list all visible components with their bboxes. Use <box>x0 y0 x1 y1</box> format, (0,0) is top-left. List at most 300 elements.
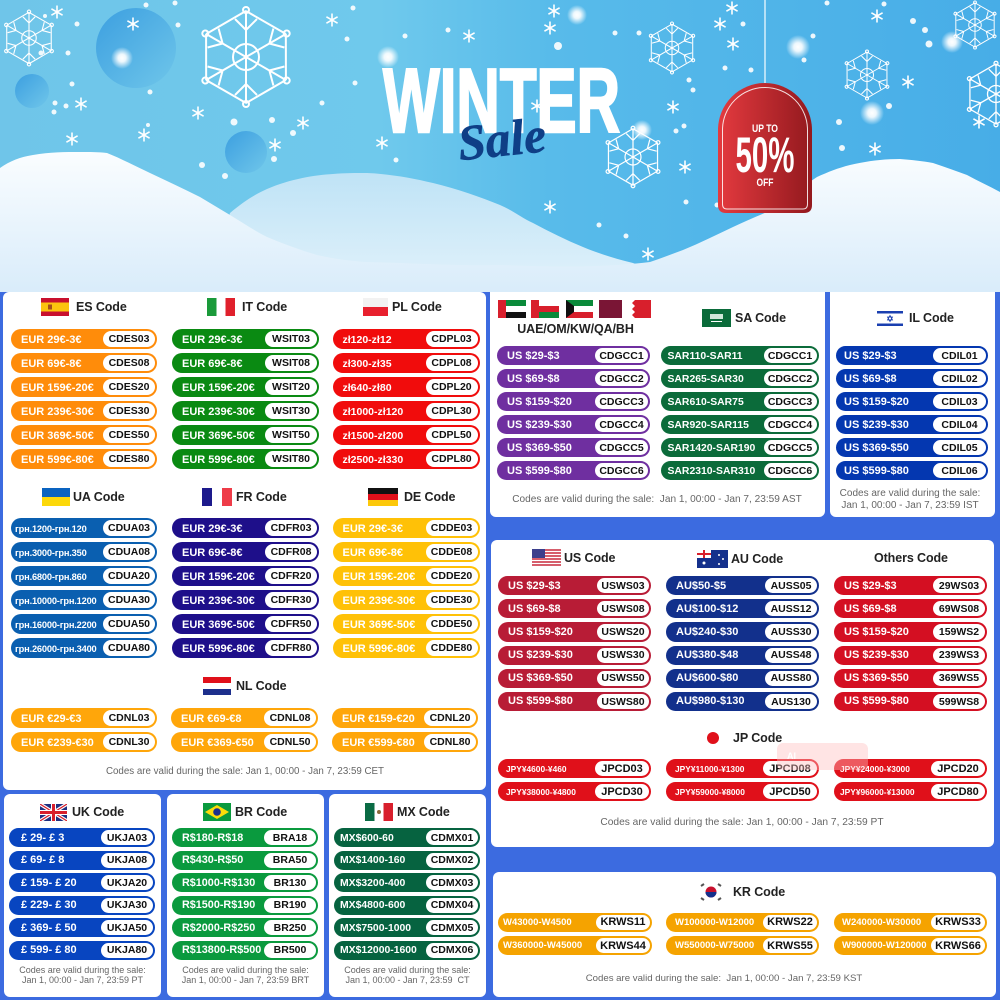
pill group: SA codes <box>660 346 818 485</box>
icon: UK flag <box>40 804 67 821</box>
heading: ES Code <box>41 298 127 316</box>
pill group: PL codes <box>333 329 480 469</box>
heading: US Code: US Code <box>564 551 615 565</box>
pill group: ES codes: EUR 599€-80€ <box>21 454 94 466</box>
pill group: Gulf codes: US $369-$50 <box>507 442 572 454</box>
icon: Australia flag <box>697 550 728 568</box>
pill group: UK codes <box>9 828 155 960</box>
heading: PL Code: PL Code <box>392 300 442 314</box>
pill group: Others codes: US $69-$8 <box>844 603 897 615</box>
pill group: FR codes: EUR 239€-30€ <box>182 594 255 606</box>
pill group: US codes: US $599-$80 <box>508 695 573 707</box>
validity note: Codes are valid during the sale: <box>344 965 471 975</box>
pill group: IL codes: CDIL05 <box>941 442 978 454</box>
pill group: NL codes right: CDNL20 <box>430 712 470 724</box>
icon: Israel flag <box>877 310 903 326</box>
heading: AU Code: AU Code <box>731 552 783 566</box>
pill group: IT codes: EUR 159€-20€ <box>182 382 255 394</box>
small asterisk snowflakes <box>51 2 985 260</box>
panel: BR codes <box>167 794 324 997</box>
pill group: MX codes: MX$3200-400 <box>340 878 405 888</box>
pill group: MX codes: MX$4800-600 <box>340 900 405 911</box>
pill group: UA codes: CDUA03 <box>108 522 150 534</box>
pill group: MX codes: CDMX01 <box>431 832 473 844</box>
pill group: BR codes: R$1000-R$130 <box>182 876 255 888</box>
icon: US flag <box>532 549 561 567</box>
icon: Ukraine flag <box>42 488 70 506</box>
panel: Gulf and SA codes <box>490 292 825 517</box>
pill group: DE codes: CDDE20 <box>431 570 472 582</box>
pill group: FR codes: CDFR80 <box>271 642 311 654</box>
pill group: UA codes: грн.10000-грн.1200 <box>15 596 97 606</box>
pill group: PL codes: CDPL50 <box>431 429 472 441</box>
pill group: PL codes: CDPL08 <box>431 357 472 369</box>
pill group: Others codes: US $159-$20 <box>844 626 909 638</box>
pill group: SA codes: SAR265-SAR30 <box>668 374 744 385</box>
pill group: ES codes <box>11 329 157 469</box>
pill group: US codes: USWS08 <box>601 603 645 615</box>
pill group: ES codes: EUR 69€-8€ <box>21 358 82 370</box>
pill group: IL codes: CDIL02 <box>941 373 978 385</box>
pill group: BR codes: BRA18 <box>273 832 307 844</box>
heading: UAE/OM/KW/QA/BH: UAE/OM/KW/QA/BH <box>517 322 634 336</box>
pill group: SA codes: SAR110-SAR11 <box>668 350 743 362</box>
pill group: SA codes: CDGCC6 <box>768 465 812 477</box>
pill group: UK codes: £ 599- £ 80 <box>21 944 77 956</box>
pill group: Gulf codes: US $599-$80 <box>507 465 572 477</box>
validity note <box>344 965 471 985</box>
pill group: US codes: US $69-$8 <box>508 603 561 615</box>
pill group: DE codes: EUR 239€-30€ <box>342 594 415 606</box>
pill group: JP codes right <box>834 759 987 805</box>
pill group: Gulf codes: CDGCC1 <box>599 350 644 362</box>
validity note: Jan 1, 00:00 - Jan 7, 23:59 CT <box>345 975 470 985</box>
pill group: MX codes: CDMX04 <box>431 899 473 911</box>
pill group: PL codes: zł1000-zł120 <box>342 406 403 418</box>
pill group: AU codes: AU$50-$5 <box>676 580 726 592</box>
sky background <box>0 0 1000 292</box>
pill group: DE codes: EUR 159€-20€ <box>342 570 415 582</box>
pill group: AU codes: AUSS80 <box>771 672 811 684</box>
pill group: UA codes <box>11 518 157 658</box>
pill group: DE codes: EUR 369€-50€ <box>342 618 415 630</box>
heading: SA Code: SA Code <box>735 311 786 325</box>
pill group: Gulf codes: CDGCC5 <box>599 442 644 454</box>
heading: SA Code <box>702 309 786 327</box>
pill group: JP codes middle: JPY¥11000-¥1300 <box>675 764 744 774</box>
pill group: AU codes <box>666 576 819 715</box>
pill group: MX codes: CDMX06 <box>431 944 473 956</box>
pill group: IL codes: CDIL03 <box>941 396 978 408</box>
pill group: ES codes: EUR 29€-3€ <box>21 334 82 346</box>
pill group: Others codes: 239WS3 <box>939 649 979 661</box>
pill group: BR codes: BRA50 <box>273 854 307 866</box>
snow hills <box>0 152 1000 292</box>
pill group: MX codes: CDMX05 <box>431 922 473 934</box>
heading: AU Code <box>697 550 783 568</box>
pill group: SA codes: CDGCC4 <box>768 419 812 431</box>
pill group: US codes <box>498 576 651 715</box>
validity note <box>830 488 990 512</box>
pill group: SA codes: SAR920-SAR115 <box>668 420 749 431</box>
pill group: NL codes left <box>11 708 157 752</box>
icon: Korea flag <box>700 883 722 901</box>
pill group: DE codes: CDDE03 <box>431 522 472 534</box>
pill group: US codes: USWS20 <box>601 626 645 638</box>
pill group: US codes: US $239-$30 <box>508 649 573 661</box>
heading: UK Code <box>40 804 124 821</box>
pill group: Others codes: US $29-$3 <box>844 580 897 592</box>
pill group: JP codes left: JPY¥38000-¥4800 <box>506 787 576 797</box>
panel: Europe codes <box>3 292 486 790</box>
pill group: SA codes: SAR2310-SAR310 <box>668 466 755 477</box>
pill group: JP codes middle <box>666 759 819 805</box>
pill group: JP codes left: JPCD03 <box>601 763 643 775</box>
pill group: IL codes: US $369-$50 <box>844 442 909 454</box>
validity note: Jan 1, 00:00 - Jan 7, 23:59 PT <box>22 975 143 985</box>
pill group: AU codes: AUSS05 <box>771 580 811 592</box>
pill group: MX codes: CDMX03 <box>431 876 473 888</box>
validity note: Codes are valid during the sale: Jan 1, 00:00 - Jan 7, 23:59 KST <box>586 973 862 984</box>
icon: Poland flag <box>363 298 388 316</box>
pill group: SA codes: CDGCC5 <box>768 442 812 454</box>
pill group: FR codes: CDFR30 <box>271 594 311 606</box>
heading: BR Code: BR Code <box>235 805 287 819</box>
pill group: AU codes: AU$980-$130 <box>676 695 744 707</box>
heading: ES Code: ES Code <box>76 300 127 314</box>
pill group: IT codes: EUR 599€-80€ <box>182 454 255 466</box>
pill group: NL codes left: CDNL30 <box>109 736 149 748</box>
icon: Mexico flag <box>365 803 393 821</box>
pill group: ES codes: CDES08 <box>109 357 149 369</box>
icon: Brazil flag <box>203 803 231 821</box>
pill group: AU codes: AU$380-$48 <box>676 649 738 661</box>
pill group: KR codes middle: KRWS55 <box>767 940 813 952</box>
pill group: JP codes middle: JPCD08 <box>769 763 811 775</box>
pill group: PL codes: CDPL03 <box>431 333 472 345</box>
heading: PL Code <box>363 298 442 316</box>
pill group: US codes: USWS80 <box>601 696 645 708</box>
heading: MX Code <box>365 803 450 821</box>
icon: Japan flag <box>707 732 719 744</box>
validity note: Codes are valid during the sale: Jan 1, 00:00 - Jan 7, 23:59 AST <box>512 494 802 505</box>
heading: KR Code <box>700 883 785 901</box>
hanging sale tag: OFF <box>756 177 774 189</box>
icon: France flag <box>202 488 232 506</box>
heading: DE Code <box>368 488 455 506</box>
pill group: UA codes: грн.26000-грн.3400 <box>15 644 97 654</box>
pill group: ES codes: EUR 239€-30€ <box>21 406 94 418</box>
validity note: Jan 1, 00:00 - Jan 7, 23:59 IST <box>841 500 979 511</box>
pill group: UK codes: UKJA03 <box>107 832 147 844</box>
pill group: FR codes: EUR 159€-20€ <box>182 570 255 582</box>
pill group: Others codes: 69WS08 <box>939 603 979 615</box>
heading: FR Code <box>202 488 287 506</box>
pill group: Others codes: 29WS03 <box>939 580 979 592</box>
pill group: ES codes: EUR 369€-50€ <box>21 430 94 442</box>
pill group: Others codes: US $369-$50 <box>844 672 909 684</box>
pill group: NL codes right: CDNL80 <box>430 736 470 748</box>
pill group: ES codes: CDES03 <box>109 333 149 345</box>
pill group: BR codes <box>172 828 318 960</box>
pill group: NL codes middle <box>171 708 318 752</box>
pill group: ES codes: CDES30 <box>109 405 149 417</box>
pill group: NL codes middle: EUR €69-€8 <box>181 712 242 724</box>
pill group: Others codes: 369WS5 <box>939 672 979 684</box>
pill group: BR codes: R$13800-R$500 <box>182 944 261 956</box>
pill group: AU codes: AU$240-$30 <box>676 626 738 638</box>
pill group: MX codes: MX$12000-1600 <box>340 945 417 956</box>
pill group: FR codes: CDFR03 <box>271 522 311 534</box>
pill group: SA codes: CDGCC3 <box>768 396 812 408</box>
pill group: UA codes: грн.16000-грн.2200 <box>15 620 97 630</box>
pill group: PL codes: CDPL30 <box>431 405 472 417</box>
pill group: KR codes middle <box>666 912 819 959</box>
watermark toolbar overlay <box>777 743 868 770</box>
pill group: NL codes left: CDNL03 <box>109 712 149 724</box>
heading: JP Code: JP Code <box>733 731 782 745</box>
pill group: SA codes: SAR1420-SAR190 <box>668 443 755 454</box>
pill group: IT codes: WSIT03 <box>272 333 310 345</box>
heading: MX Code: MX Code <box>397 805 450 819</box>
pill group: IL codes: US $29-$3 <box>844 350 897 362</box>
pill group: Gulf codes: US $239-$30 <box>507 419 572 431</box>
pill group: UK codes: £ 229- £ 30 <box>21 899 77 911</box>
validity note: Codes are valid during the sale: <box>182 965 309 975</box>
pill group: JP codes right: JPY¥96000-¥13000 <box>840 787 915 797</box>
heading: BR Code <box>203 803 287 821</box>
pill group: DE codes: EUR 599€-80€ <box>342 642 415 654</box>
pill group: IT codes: WSIT30 <box>272 405 310 417</box>
hanging sale tag: 50% <box>736 127 794 183</box>
heading: JP Code <box>707 729 782 747</box>
panel: IL codes <box>830 292 995 517</box>
pill group: PL codes: zł120-zł12 <box>342 334 392 346</box>
pill group: MX codes: MX$1400-160 <box>340 855 405 866</box>
pill group: PL codes: CDPL80 <box>431 453 472 465</box>
pill group: AU codes: AUS130 <box>771 696 811 708</box>
pill group: JP codes right: JPCD80 <box>937 786 979 798</box>
validity note <box>19 965 146 985</box>
pill group: FR codes: EUR 369€-50€ <box>182 618 255 630</box>
pill group: Gulf codes <box>497 346 650 480</box>
pill group: KR codes left: KRWS44 <box>600 940 646 952</box>
heading: DE Code: DE Code <box>404 490 455 504</box>
pill group: UK codes: UKJA08 <box>107 854 147 866</box>
pill group: IL codes: CDIL04 <box>941 419 978 431</box>
heading: IL Code <box>877 309 954 327</box>
title: WINTER: WINTER <box>383 51 620 152</box>
pill group: KR codes middle: W100000-W12000 <box>675 917 754 928</box>
pill group: NL codes left: EUR €239-€30 <box>21 736 94 748</box>
pill group: JP codes left <box>498 759 651 805</box>
pill group: NL codes middle: EUR €369-€50 <box>181 736 254 748</box>
pill group: KR codes left: KRWS11 <box>600 916 646 928</box>
heading: UK Code: UK Code <box>72 805 124 819</box>
validity note: Codes are valid during the sale: <box>19 965 146 975</box>
pill group: IT codes: WSIT08 <box>272 357 310 369</box>
pill group: US codes: USWS03 <box>601 580 645 592</box>
pill group: BR codes: R$180-R$18 <box>182 832 243 844</box>
pill group: JP codes right: JPY¥24000-¥3000 <box>840 764 910 774</box>
pill group: AU codes: AUSS48 <box>771 649 811 661</box>
pill group: NL codes middle: CDNL50 <box>270 736 310 748</box>
heading: NL Code <box>203 677 286 695</box>
pill group: UA codes: CDUA08 <box>108 546 150 558</box>
pill group: UA codes: CDUA80 <box>108 642 150 654</box>
pill group: Gulf codes: US $29-$3 <box>507 350 560 362</box>
pill group: FR codes <box>172 518 319 658</box>
pill group: JP codes left: JPCD30 <box>601 786 643 798</box>
heading: Others Code: Others Code <box>874 551 948 565</box>
pill group: KR codes right: KRWS66 <box>935 940 981 952</box>
pill group: IL codes <box>836 346 988 485</box>
pill group: Others codes: 599WS8 <box>939 696 979 708</box>
pill group: BR codes: BR130 <box>274 876 306 888</box>
pill group: BR codes: R$2000-R$250 <box>182 922 255 934</box>
pill group: KR codes left <box>498 912 652 959</box>
pill group: AU codes: AUSS12 <box>771 603 811 615</box>
heading: IT Code: IT Code <box>242 300 287 314</box>
pill group: UK codes: £ 29- £ 3 <box>21 832 64 844</box>
title: Sale: Sale <box>455 106 549 171</box>
pill group: Gulf codes: CDGCC4 <box>599 419 644 431</box>
white dots <box>38 0 932 238</box>
pill group: ES codes: CDES20 <box>109 381 149 393</box>
panel: UK codes <box>4 794 161 997</box>
pill group: IT codes: EUR 69€-8€ <box>182 358 243 370</box>
pill group: KR codes left: W360000-W45000 <box>503 940 582 951</box>
validity note: Codes are valid during the sale: Jan 1, 00:00 - Jan 7, 23:59 CET <box>106 766 384 777</box>
banner: winter sale <box>0 0 1000 292</box>
pill group: MX codes: CDMX02 <box>431 854 473 866</box>
pill group: ES codes: CDES50 <box>109 429 149 441</box>
validity note: Codes are valid during the sale: Jan 1, 00:00 - Jan 7, 23:59 PT <box>600 817 884 828</box>
pill group: PL codes: zł640-zł80 <box>342 382 392 394</box>
pill group: PL codes: CDPL20 <box>431 381 472 393</box>
pill group: UK codes: £ 159- £ 20 <box>21 876 77 888</box>
pill group: SA codes: SAR610-SAR75 <box>668 397 744 408</box>
pill group: UK codes: UKJA80 <box>107 944 147 956</box>
pill group: IL codes: CDIL01 <box>941 350 978 362</box>
pill group: UA codes: грн.3000-грн.350 <box>15 548 87 558</box>
validity note: Codes are valid during the sale: <box>840 488 980 499</box>
pill group: IL codes: US $239-$30 <box>844 419 909 431</box>
pill group: UA codes: CDUA30 <box>108 594 150 606</box>
heading: IT Code <box>207 298 287 316</box>
pill group: Gulf codes: US $69-$8 <box>507 373 560 385</box>
icon: Spain flag <box>41 298 69 316</box>
glowing lights <box>111 5 963 140</box>
pill group: IL codes: US $599-$80 <box>844 465 909 477</box>
panel: US AU Others JP codes <box>491 540 994 847</box>
pill group: MX codes <box>334 828 480 960</box>
hanging sale tag <box>718 0 812 213</box>
icon: Germany flag <box>368 488 398 506</box>
pill group: ES codes: EUR 159€-20€ <box>21 382 94 394</box>
pill group: US codes: US $369-$50 <box>508 672 573 684</box>
pill group: UK codes: UKJA20 <box>107 876 147 888</box>
pill group: DE codes: CDDE30 <box>431 594 472 606</box>
icon: Gulf flags <box>498 300 651 318</box>
pill group: DE codes <box>333 518 480 658</box>
pill group: FR codes: EUR 69€-8€ <box>182 546 243 558</box>
pill group: FR codes: CDFR50 <box>271 618 311 630</box>
pill group: MX codes: MX$600-60 <box>340 832 394 844</box>
pill group: US codes: US $159-$20 <box>508 626 573 638</box>
validity note <box>182 965 310 985</box>
icon: large snowflakes <box>0 0 1000 194</box>
heading: NL Code: NL Code <box>236 679 286 693</box>
pill group: Gulf codes: CDGCC6 <box>599 465 644 477</box>
pill group: BR codes: BR500 <box>274 944 306 956</box>
pill group: NL codes right: EUR €159-€20 <box>342 712 415 724</box>
pill group: KR codes middle: W550000-W75000 <box>675 940 754 951</box>
pill group: Others codes <box>834 576 987 715</box>
pill group: NL codes left: EUR €29-€3 <box>21 712 82 724</box>
pill group: Others codes: 159WS2 <box>939 626 979 638</box>
pill group: IT codes: WSIT50 <box>272 429 310 441</box>
pill group: IT codes: EUR 369€-50€ <box>182 430 255 442</box>
panel: MX codes <box>329 794 486 997</box>
pill group: KR codes left: W43000-W4500 <box>503 917 572 928</box>
pill group: IT codes: EUR 29€-3€ <box>182 334 243 346</box>
icon: Saudi flag <box>702 309 731 327</box>
pill group: NL codes middle: CDNL08 <box>270 712 310 724</box>
pill group: UK codes: £ 369- £ 50 <box>21 922 77 934</box>
pill group: PL codes: zł300-zł35 <box>342 358 392 370</box>
pill group: JP codes right: JPCD20 <box>937 763 979 775</box>
pill group: JP codes middle: JPY¥59000-¥8000 <box>675 787 745 797</box>
pill group: DE codes: CDDE50 <box>431 618 472 630</box>
heading: US Code <box>532 549 615 567</box>
pill group: UA codes: CDUA20 <box>108 570 150 582</box>
pill group: AU codes: AU$100-$12 <box>676 603 738 615</box>
pill group: SA codes: CDGCC1 <box>768 350 812 362</box>
pill group: AU codes: AU$600-$80 <box>676 672 738 684</box>
pill group: PL codes: zł1500-zł200 <box>342 430 403 442</box>
validity note: Jan 1, 00:00 - Jan 7, 23:59 BRT <box>182 975 309 985</box>
pill group: IT codes <box>172 329 319 469</box>
pill group: DE codes: CDDE08 <box>431 546 472 558</box>
blue bubbles <box>15 8 267 173</box>
pill group: NL codes right <box>332 708 478 752</box>
pill group: BR codes: BR250 <box>274 922 306 934</box>
pill group: FR codes: EUR 29€-3€ <box>182 522 243 534</box>
pill group: ES codes: CDES80 <box>109 453 149 465</box>
pill group: KR codes right: KRWS33 <box>935 916 981 928</box>
pill group: SA codes: CDGCC2 <box>768 373 812 385</box>
pill group: DE codes: CDDE80 <box>431 642 472 654</box>
pill group: MX codes: MX$7500-1000 <box>340 922 411 934</box>
pill group: DE codes: EUR 29€-3€ <box>342 522 403 534</box>
pill group: UA codes: CDUA50 <box>108 618 150 630</box>
pill group: Others codes: US $599-$80 <box>844 695 909 707</box>
pill group: Gulf codes: CDGCC2 <box>599 373 644 385</box>
icon: Netherlands flag <box>203 677 231 695</box>
heading: IL Code: IL Code <box>909 311 954 325</box>
pill group: FR codes: EUR 599€-80€ <box>182 642 255 654</box>
hanging sale tag: UP TO <box>752 123 778 135</box>
pill group: IL codes: US $159-$20 <box>844 396 909 408</box>
heading: UA Code: UA Code <box>73 490 125 504</box>
pill group: Gulf codes: CDGCC3 <box>599 396 644 408</box>
pill group: BR codes: R$430-R$50 <box>182 854 243 866</box>
pill group: Others codes: US $239-$30 <box>844 649 909 661</box>
pill group: UA codes: грн.6800-грн.860 <box>15 572 87 582</box>
pill group: FR codes: CDFR08 <box>271 546 311 558</box>
pill group: PL codes: zł2500-zł330 <box>342 454 403 466</box>
